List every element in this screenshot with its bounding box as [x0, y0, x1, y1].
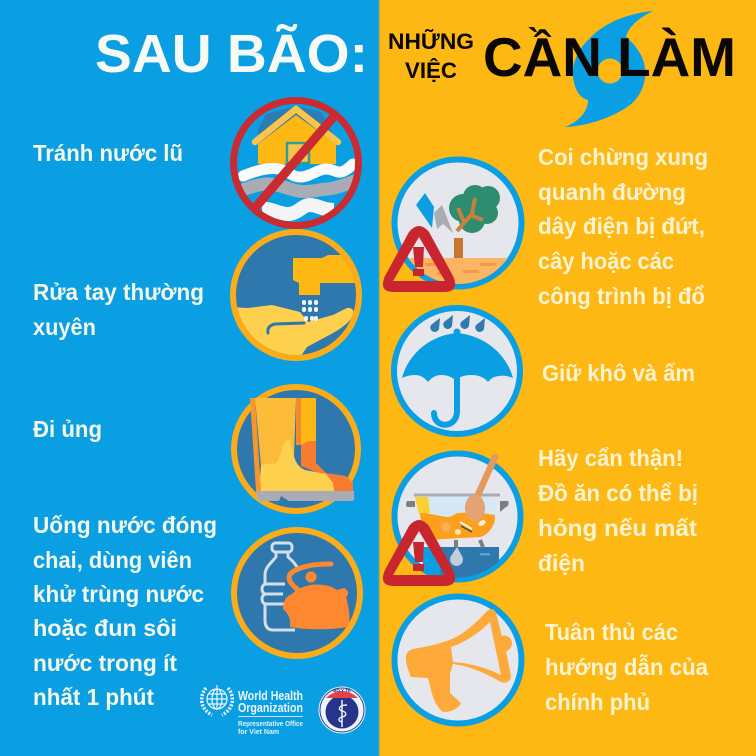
text: tuân thủ: hướng dẫn của [545, 653, 708, 680]
logo: world health organization: Organization [238, 701, 303, 715]
text: uống nước: nước trong ít [33, 650, 177, 676]
text: coi chừng [538, 144, 708, 309]
text: hãy cẩn thận [538, 445, 698, 576]
icon: cooking pot [394, 454, 520, 590]
icon: danger sites [392, 160, 524, 298]
text: rửa tay thường xuyên: xuyên [33, 314, 96, 340]
text: coi chừng: dây điện bị đứt, [538, 213, 705, 239]
icon: warning triangle upper [383, 226, 455, 292]
text: coi chừng: Coi chừng xung [538, 144, 708, 170]
text: rửa tay thường xuyên: Rửa tay thường [33, 279, 204, 305]
text: coi chừng: quanh đường [538, 179, 686, 205]
text: tuân thủ [545, 619, 708, 715]
text: uống nước: hoặc đun sôi [33, 615, 177, 641]
title: những việc: NHỮNG [388, 29, 474, 54]
text: hãy cẩn thận: Đồ ăn có thể bị [538, 480, 698, 506]
icon: warning mark upper [413, 247, 424, 276]
text: tuân thủ: chính phủ [545, 689, 650, 715]
text: đi ủng: Đi ủng [33, 416, 102, 442]
icon: rubber boot [234, 387, 358, 511]
icon: warning mark lower [413, 542, 424, 571]
title: những việc: VIỆC [405, 58, 457, 83]
icon: umbrella [394, 308, 520, 434]
logo: ministry of health: BỘ Y TẾ [333, 686, 351, 693]
text: uống nước [33, 512, 217, 710]
text: tuân thủ: Tuân thủ các [545, 619, 678, 645]
icon: hurricane swirl [565, 11, 653, 127]
text: rửa tay thường xuyên [33, 279, 204, 340]
logo: world health organization [202, 685, 303, 736]
text: tránh nước lũ: Tránh nước lũ [33, 140, 183, 166]
title: cần làm: CẦN LÀM [483, 26, 736, 88]
text: uống nước: khử trùng nước [33, 581, 204, 607]
logo: world health organization: World Health [238, 689, 303, 703]
icon: water bottle and kettle [234, 530, 360, 656]
logo: world health organization: Representative Office [238, 721, 303, 728]
icon: no flood [234, 100, 358, 226]
text: coi chừng: công trình bị đổ [538, 283, 705, 309]
icon: hand washing [230, 232, 365, 365]
right edge [378, 0, 380, 756]
icon: megaphone [394, 596, 522, 724]
text: hãy cẩn thận: hỏng nếu mất [538, 515, 697, 541]
text: uống nước: Uống nước đóng [33, 512, 217, 538]
text: uống nước: chai, dùng viên [33, 547, 192, 573]
text: coi chừng: cây hoặc các [538, 248, 674, 274]
text: uống nước: nhất 1 phút [33, 684, 154, 710]
text: hãy cẩn thận: Hãy cẩn thận! [538, 445, 683, 471]
logo: world health organization: for Viet Nam [238, 729, 279, 736]
icon: warning triangle lower [383, 520, 455, 586]
text: giữ khô và ấm: Giữ khô và ấm [542, 360, 695, 386]
title: sau bão: SAU BÃO: [95, 24, 368, 84]
text: hãy cẩn thận: điện [538, 550, 585, 576]
title: những việc [388, 29, 474, 83]
logo: ministry of health [318, 686, 366, 734]
